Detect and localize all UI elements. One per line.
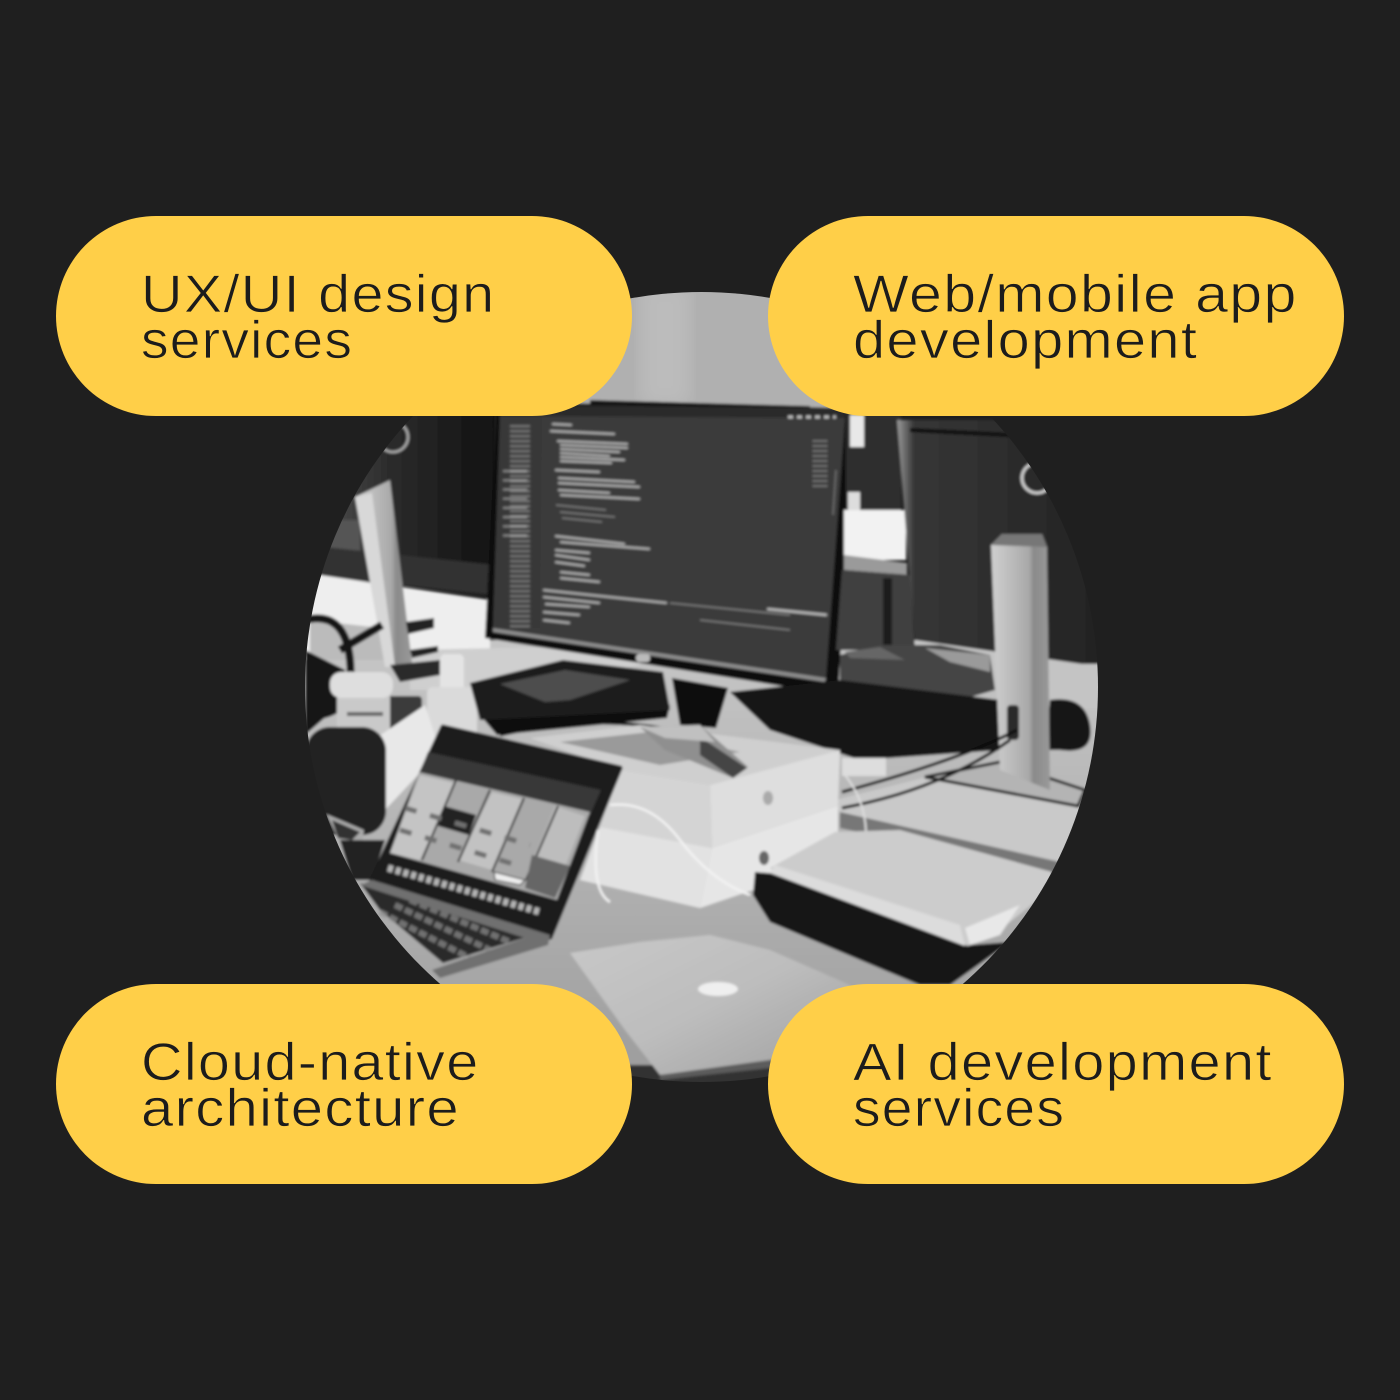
pill: UX/UI design services [56, 216, 632, 416]
under-monitor tray [470, 660, 670, 735]
pill: AI development services [768, 984, 1344, 1184]
pill: Cloud-native architecture [56, 984, 632, 1184]
wall [577, 292, 833, 410]
closed macbook [570, 935, 850, 1080]
pill: Web/mobile app development [768, 216, 1344, 416]
label: Web/mobile app development [853, 265, 1298, 370]
between monitors [846, 412, 901, 512]
label: AI development services: services [853, 1079, 1065, 1138]
label: UX/UI design services: services [141, 311, 353, 370]
photo: desk with monitors and laptop [305, 292, 1098, 1082]
monitor foot [640, 725, 748, 778]
plastic-wrapped case [753, 830, 1052, 985]
label: AI development services [853, 1033, 1273, 1138]
black mug [388, 694, 424, 729]
monitor neck [672, 678, 728, 728]
bag left [306, 727, 386, 835]
cup [330, 672, 393, 745]
desk surface [300, 640, 1110, 1090]
left monitor back [300, 405, 495, 584]
right stand [925, 534, 1085, 806]
white boxes [530, 725, 866, 908]
label: Web/mobile app development: Web/mobile app [853, 265, 1298, 324]
bottle [427, 654, 477, 739]
label: AI development services: AI development [853, 1033, 1273, 1092]
laptop [360, 727, 620, 978]
cables left [305, 618, 382, 715]
bright desk behind left monitor [300, 570, 490, 660]
main monitor [485, 400, 855, 695]
right monitor back [897, 420, 1110, 668]
label: Cloud-native architecture: Cloud-native [141, 1033, 479, 1092]
tissue [376, 705, 438, 810]
label: Cloud-native architecture: architecture [141, 1079, 460, 1138]
cables right [500, 723, 1017, 808]
bag behind right [1083, 662, 1098, 668]
label: UX/UI design services: UX/UI design [141, 265, 495, 324]
label: Web/mobile app development: development [853, 311, 1198, 370]
small desk elements [842, 758, 886, 776]
left monitor stand [355, 480, 440, 682]
label: UX/UI design services [141, 265, 495, 370]
label: Cloud-native architecture [141, 1033, 479, 1138]
